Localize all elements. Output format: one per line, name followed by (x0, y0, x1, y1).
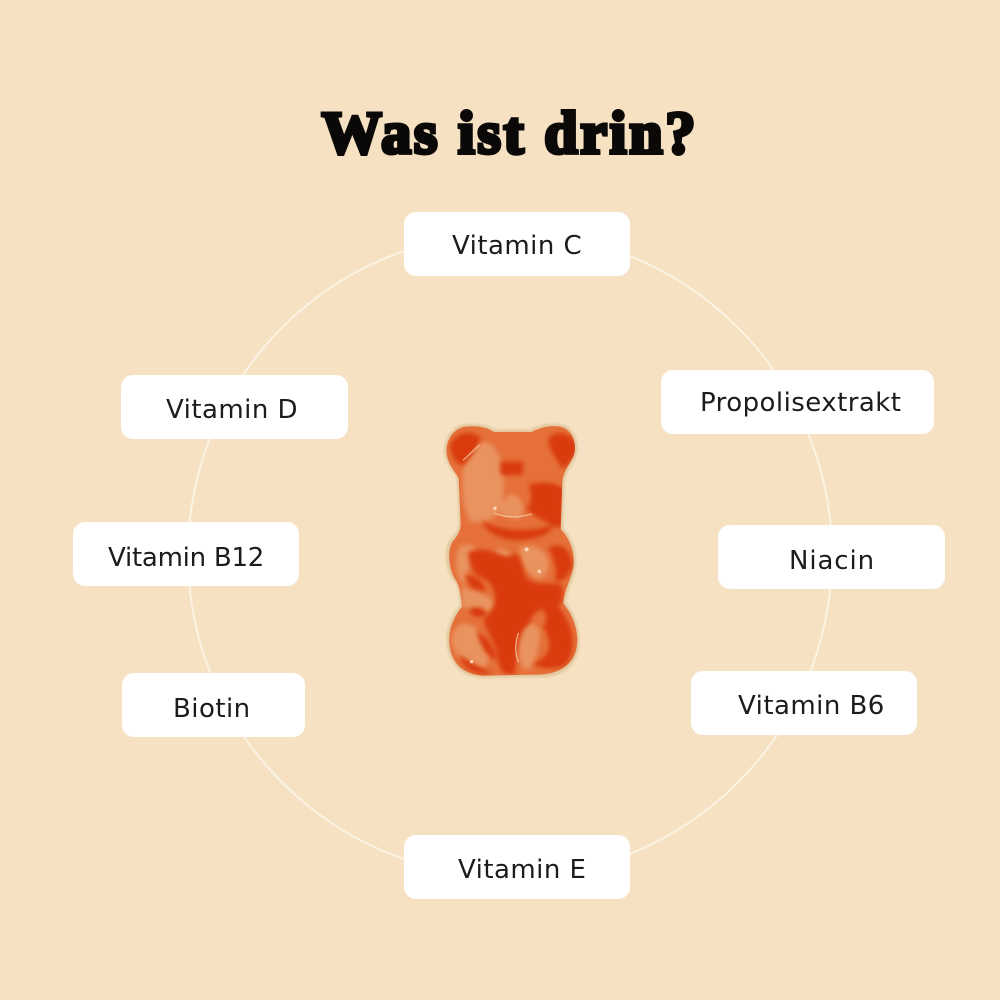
label: Niacin: Niacin (789, 546, 875, 576)
title: Was ist drin? (322, 100, 698, 166)
bear shading (451, 433, 577, 674)
label: Biotin (122, 673, 305, 737)
label: Vitamin E: Vitamin E (458, 855, 586, 885)
label: Vitamin B6 (691, 671, 917, 735)
icon: orange gummy bear (443, 423, 580, 679)
label: Vitamin B12 (73, 522, 299, 586)
label: Vitamin C (404, 212, 630, 276)
label: Niacin (718, 525, 945, 589)
bear highlights (452, 442, 548, 670)
label: Vitamin E (404, 835, 630, 899)
label: Propolisextrakt (661, 370, 934, 434)
bear body (447, 426, 577, 676)
label: Vitamin D (121, 375, 348, 439)
label: Vitamin C: Vitamin C (452, 231, 582, 261)
label: Vitamin B12: Vitamin B12 (108, 543, 264, 573)
label: Biotin: Biotin (173, 694, 251, 724)
bear glints (470, 507, 541, 663)
label: Vitamin B6: Vitamin B6 (738, 691, 885, 721)
label: Vitamin D: Vitamin D (166, 395, 298, 425)
bear specular marks (463, 445, 532, 662)
bear halo (444, 423, 580, 678)
label: Propolisextrakt: Propolisextrakt (700, 388, 901, 418)
